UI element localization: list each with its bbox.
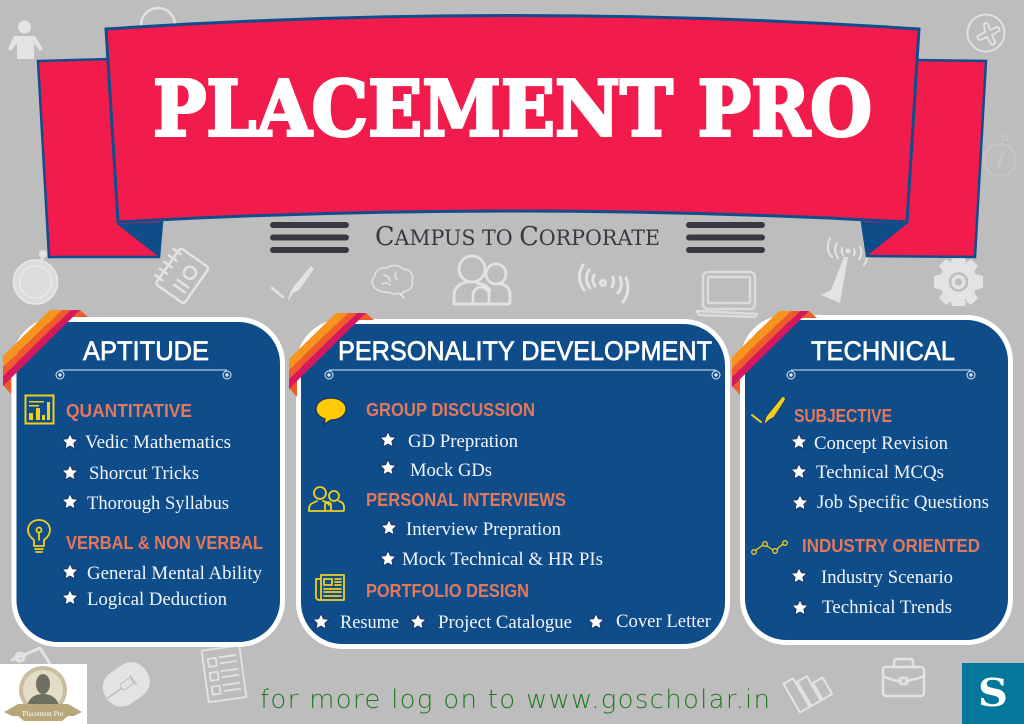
ribbon corner: [732, 311, 817, 395]
list item: Project Catalogue: [438, 612, 572, 633]
icon: signal tower: [821, 238, 867, 303]
list item: General Mental Ability: [87, 563, 262, 584]
section: industry oriented: INDUSTRY ORIENTED: [802, 536, 980, 556]
list item: Thorough Syllabus: [87, 493, 229, 514]
section: personal interviews: PERSONAL INTERVIEWS: [366, 490, 566, 510]
list item: Logical Deduction: [87, 589, 227, 610]
icon: briefcase: [883, 659, 924, 696]
list item: Resume: [340, 612, 399, 633]
panel: aptitude: [3, 310, 282, 644]
logo: placement pro badge: [0, 664, 87, 724]
logo: placement pro badge: Placement Pro: [23, 710, 64, 718]
icon: compass: [984, 136, 1016, 176]
icon: pen: [272, 266, 314, 300]
list item: GD Prepration: [408, 431, 518, 452]
icon: people: [454, 256, 510, 304]
heading flourish: [787, 370, 975, 379]
icon: mouse: [96, 655, 157, 713]
list item: Mock Technical & HR PIs: [402, 549, 603, 570]
logo: goscholar: S: [978, 670, 1008, 715]
list item: Cover Letter: [616, 611, 712, 632]
subtitle bars left: [270, 222, 349, 253]
icon: wireless signal: [579, 265, 628, 302]
heading: TECHNICAL: [811, 336, 955, 366]
icon: people: [309, 487, 344, 511]
list item: Shorcut Tricks: [89, 463, 199, 484]
icon: speech bubble: [316, 398, 346, 425]
icon: bar chart: [26, 396, 54, 424]
icon: laptop: [697, 272, 757, 317]
heading flourish: [56, 370, 231, 379]
section: verbal: VERBAL & NON VERBAL: [66, 533, 263, 553]
heading flourish: [325, 370, 720, 379]
icon: person: [8, 20, 43, 59]
icon: notebook: [151, 245, 209, 304]
icon: newspaper: [316, 575, 344, 600]
icon: plus circle: [968, 14, 1004, 52]
panel: personality development: [289, 313, 728, 646]
banner: back left fold: [38, 59, 162, 257]
list item: Vedic Mathematics: [85, 432, 231, 453]
logo: goscholar: [962, 663, 1024, 724]
list item: Technical MCQs: [816, 462, 944, 483]
list item: [313, 612, 399, 633]
icon: stopwatch: [14, 250, 58, 304]
list item: Concept Revision: [814, 433, 948, 454]
icon: pen: [752, 397, 785, 425]
banner: main ribbon: [106, 16, 919, 222]
panel: technical: [732, 311, 1010, 642]
icon: light bulb: [28, 520, 50, 552]
ribbon corner: [289, 313, 374, 397]
list item: Interview Prepration: [406, 519, 561, 540]
subtitle bars right: [686, 222, 765, 253]
list item: Job Specific Questions: [817, 492, 989, 513]
icon: magnifier: [141, 8, 175, 42]
icon: gear: [934, 258, 983, 306]
footer link text: for more log on to www.goscholar.in: [260, 685, 770, 715]
list item: Industry Scenario: [821, 567, 953, 588]
icon: trend line: [752, 541, 787, 554]
icon: brain: [372, 265, 413, 298]
icon: checklist: [202, 645, 246, 702]
heading: APTITUDE: [83, 336, 209, 366]
list item: Mock GDs: [410, 460, 492, 481]
list item: Technical Trends: [822, 597, 952, 618]
ribbon corner: [3, 310, 88, 394]
section: quantitative: QUANTITATIVE: [66, 401, 192, 421]
banner: back right fold: [862, 60, 986, 257]
heading: PERSONALITY DEVELOPMENT: [338, 336, 712, 366]
section: portfolio design: PORTFOLIO DESIGN: [366, 581, 529, 601]
section: group discussion: GROUP DISCUSSION: [366, 400, 535, 420]
title: PLACEMENT PRO: [153, 64, 872, 154]
subtitle: CAMPUS TO CORPORATE: [375, 222, 660, 252]
icon: books: [784, 665, 832, 712]
icon: camera key: [12, 648, 50, 664]
section: subjective: SUBJECTIVE: [794, 406, 892, 426]
